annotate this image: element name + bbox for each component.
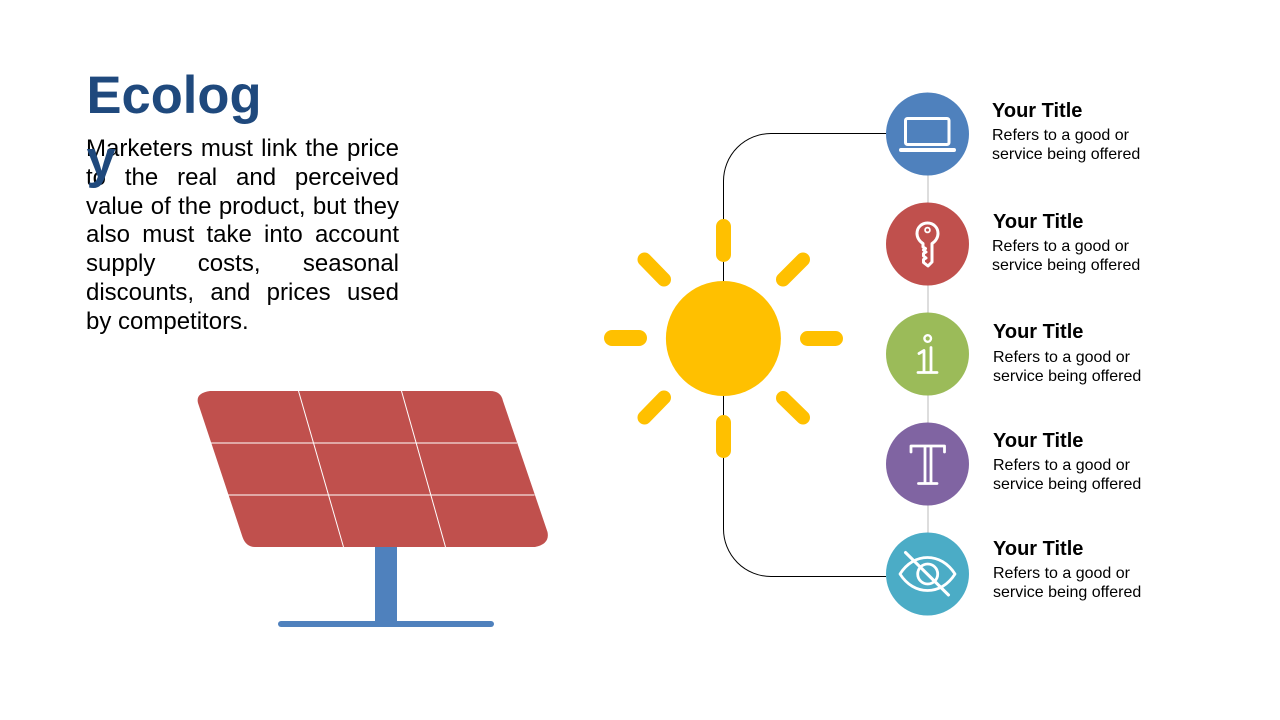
item 3 description: service being offered xyxy=(993,368,1141,385)
item 5 description: Refers to a good or xyxy=(993,565,1130,582)
list item 1 text xyxy=(992,100,1140,163)
icon: information in green circle xyxy=(886,312,969,396)
item 4 description: service being offered xyxy=(993,476,1141,493)
item 2 description: Refers to a good or xyxy=(992,238,1129,255)
icon: text T in purple circle xyxy=(886,422,969,506)
icon: sun xyxy=(612,226,836,450)
solar panel illustration xyxy=(198,391,548,627)
item 2 title: Your Title xyxy=(993,211,1083,233)
item 4 title: Your Title xyxy=(993,430,1083,452)
vertical line joining the circles xyxy=(927,175,929,533)
item 5 description: service being offered xyxy=(993,584,1141,601)
title: Ecology xyxy=(86,66,262,189)
connector line from sun to list xyxy=(724,134,886,576)
item 2 description: service being offered xyxy=(992,257,1140,274)
list item 4 text xyxy=(993,430,1141,493)
item 1 title: Your Title xyxy=(992,100,1082,122)
item 1 description xyxy=(992,127,1140,163)
list item 3 text xyxy=(993,321,1141,385)
item 1 description: Refers to a good or xyxy=(992,127,1129,144)
item 5 description xyxy=(993,565,1141,601)
body paragraph: Marketers must link the price to the real and perceived value of the product, but they also must take into account supply costs, seasonal discounts, and prices used by competitors. xyxy=(86,135,399,335)
panel face with grid xyxy=(198,391,548,547)
icon: key in red circle xyxy=(886,202,969,286)
item 3 description xyxy=(993,349,1141,385)
item 1 description: service being offered xyxy=(992,146,1140,163)
list item 5 text xyxy=(993,538,1141,601)
icon: crossed-out eye in teal circle xyxy=(886,532,969,616)
item 2 description xyxy=(992,238,1140,274)
panel stand xyxy=(278,545,494,627)
item 4 description xyxy=(993,457,1141,493)
icon: laptop in blue circle xyxy=(886,92,969,176)
item 5 title: Your Title xyxy=(993,538,1083,560)
list item 2 text xyxy=(992,211,1140,274)
item 3 description: Refers to a good or xyxy=(993,349,1130,366)
item 4 description: Refers to a good or xyxy=(993,457,1130,474)
item 3 title: Your Title xyxy=(993,321,1083,343)
